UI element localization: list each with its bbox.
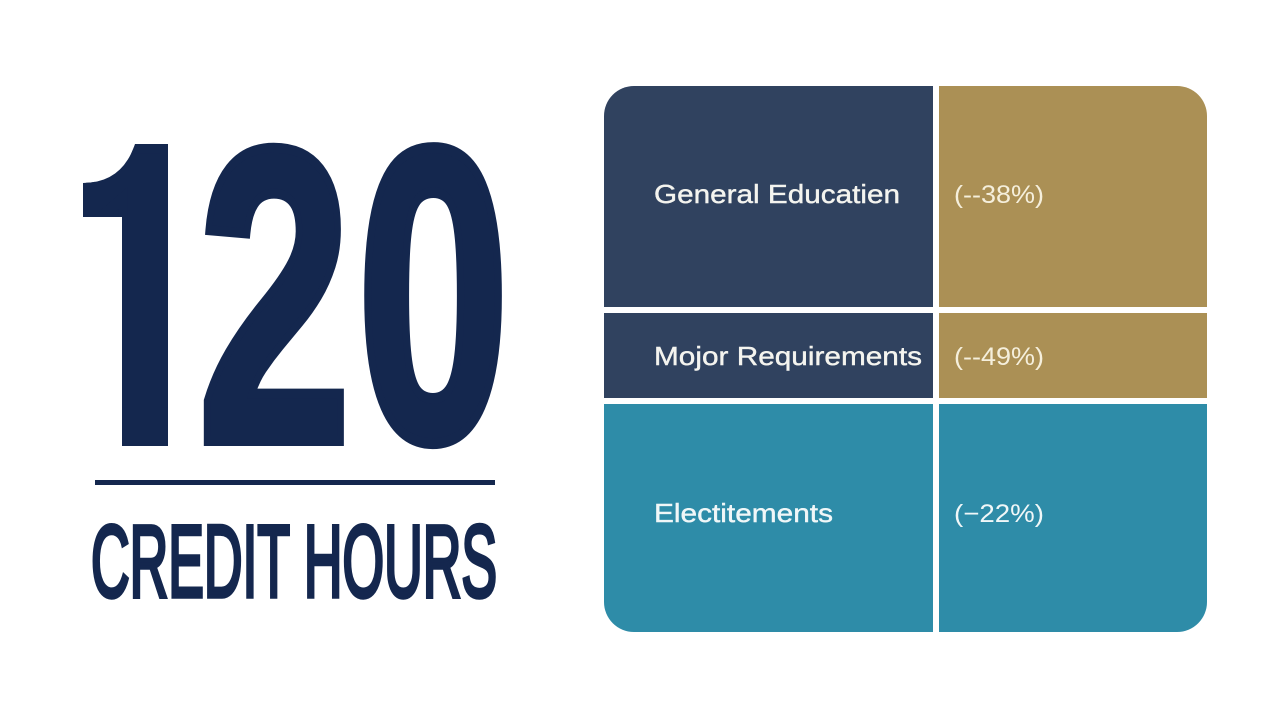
label: credit hours: CREDIT HOURS	[91, 504, 497, 618]
cell: general education share	[939, 86, 1207, 307]
digit 0: 0	[357, 61, 510, 528]
label: general education: General Educatien	[654, 179, 900, 209]
digit 1	[83, 144, 168, 446]
digit 1: 1	[50, 55, 224, 539]
row: electives	[604, 404, 1207, 632]
label: electives: Electitements	[654, 498, 833, 528]
value: general education share: (--38%)	[954, 181, 1044, 209]
cell: electives name	[604, 404, 933, 632]
big number: 120	[83, 142, 502, 450]
value: major requirements share: (--49%)	[954, 343, 1044, 371]
cell: major requirements name	[604, 313, 933, 398]
cell: general education name	[604, 86, 933, 307]
value: electives share: (−22%)	[954, 500, 1044, 528]
panel: credit breakdown grid	[604, 86, 1207, 632]
digit 2: 2	[198, 62, 352, 531]
cell: electives share	[939, 404, 1207, 632]
cell: major requirements share	[939, 313, 1207, 398]
label: major requirements: Mojor Requirements	[654, 341, 922, 371]
divider line	[95, 480, 495, 485]
row: major requirements	[604, 313, 1207, 398]
infographic canvas	[83, 86, 1207, 632]
row: general education	[604, 86, 1207, 307]
